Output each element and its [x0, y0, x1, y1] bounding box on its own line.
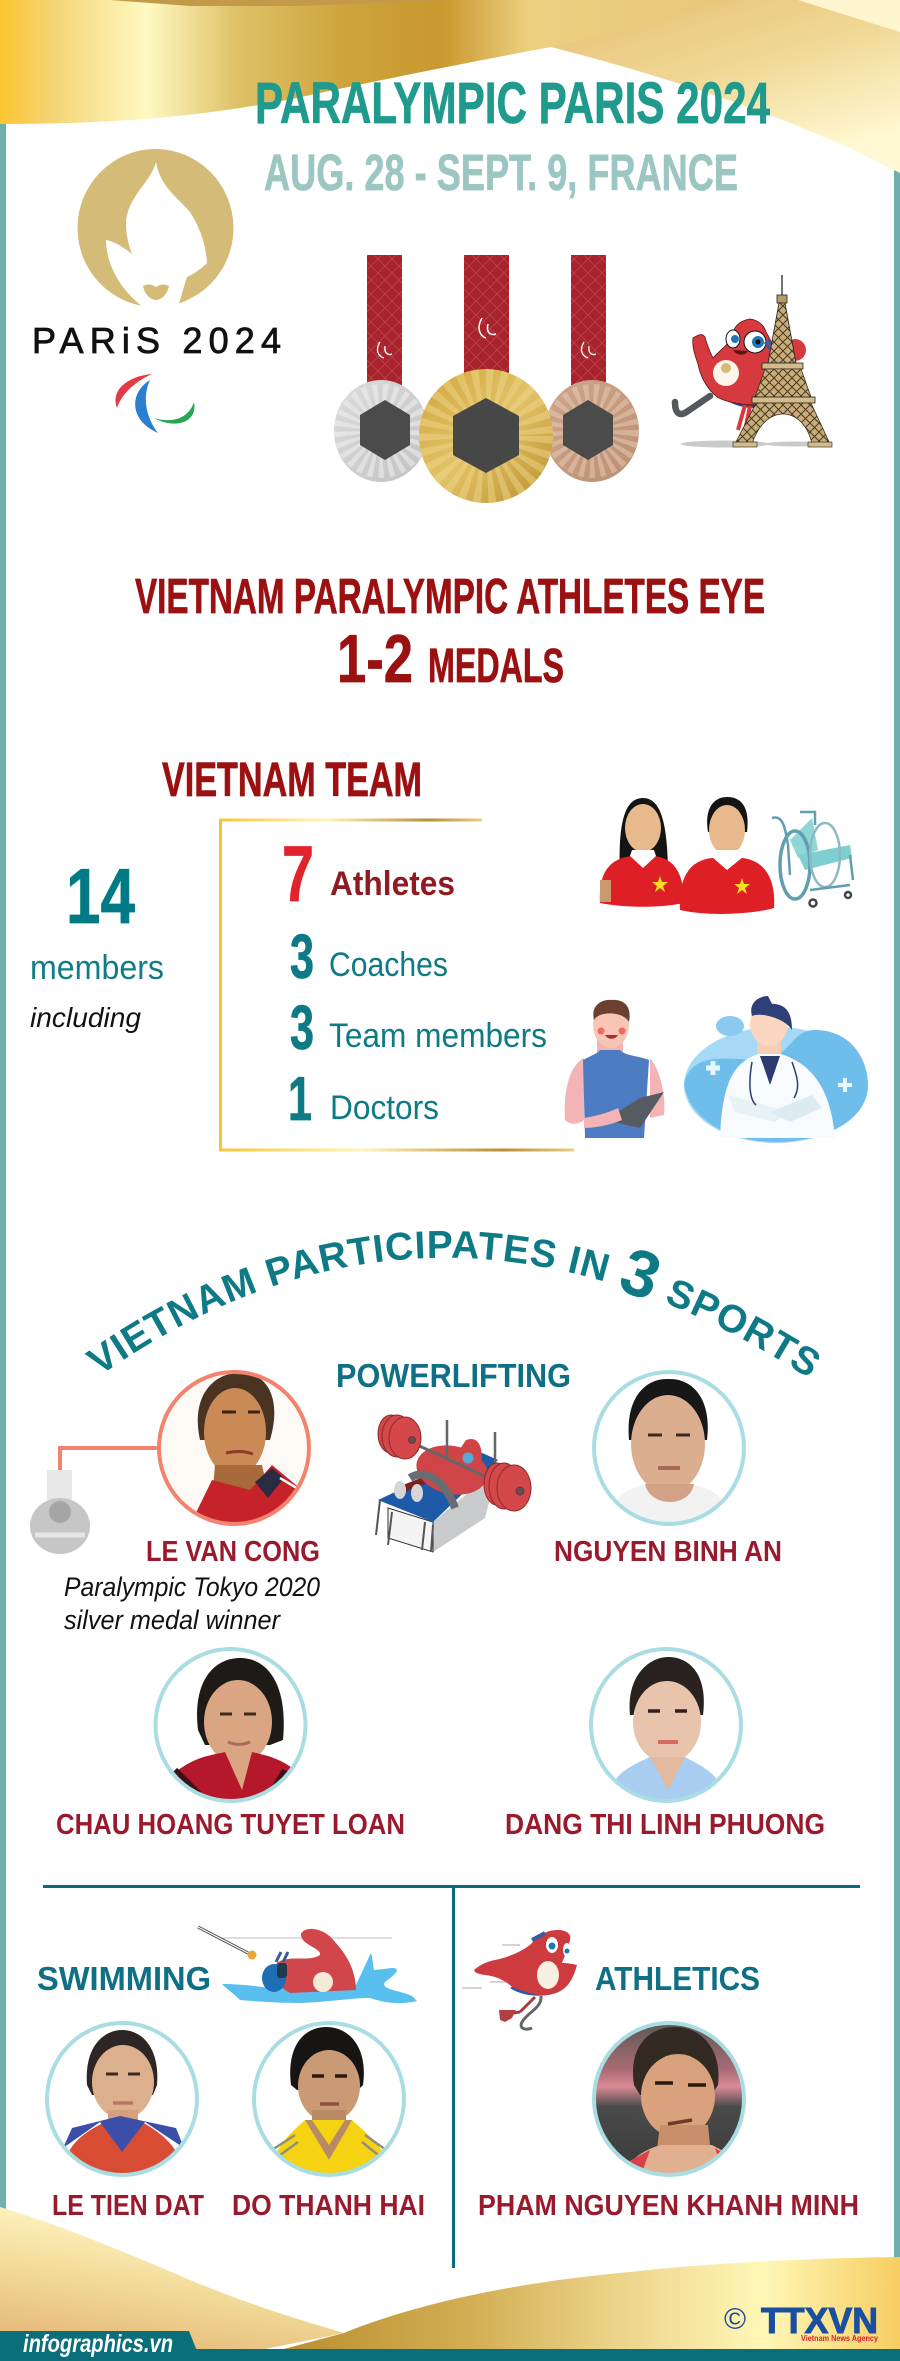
team members row: 3	[290, 994, 314, 1063]
divider lines	[43, 1885, 860, 2268]
athletes row	[282, 829, 455, 918]
doctors row: 1	[288, 1065, 312, 1134]
silver medal icon	[30, 1470, 90, 1554]
including label: including	[30, 1002, 141, 1033]
Paralympic agitos symbol	[115, 374, 194, 433]
infographics.vn label: infographics.vn	[23, 2330, 173, 2358]
portrait	[64, 2030, 182, 2173]
doctors row: Doctors	[330, 1089, 439, 1127]
portrait frame	[594, 2023, 744, 2175]
headline number 1-2: 1-2	[337, 621, 413, 697]
achievement note: silver medal winner	[64, 1605, 281, 1635]
portrait	[174, 1658, 291, 1799]
portrait	[274, 2027, 384, 2173]
Vietnam team heading: VIETNAM TEAM	[162, 754, 422, 807]
bronze ribbon	[571, 255, 606, 385]
copyright symbol: ©	[724, 2303, 746, 2336]
icon: coach with tablet	[565, 1000, 664, 1138]
silver ribbon	[367, 255, 402, 385]
agency letters: TTXVN	[761, 2300, 878, 2341]
icon: swimming mascot	[198, 1927, 417, 2003]
achievement note	[64, 1572, 320, 1635]
Phryge mascot with Eiffel tower	[675, 275, 832, 448]
TTXVN copyright logo	[724, 2300, 878, 2343]
top gold ribbon header	[0, 0, 900, 173]
curved sports heading: VIETNAM PARTICIPATES IN	[84, 1231, 610, 1370]
name: DO THANH HAI	[232, 2190, 425, 2222]
name: LE VAN CONG	[146, 1536, 320, 1568]
name: DANG THI LINH PHUONG	[505, 1809, 825, 1841]
athlete: Nguyen Binh An	[554, 1372, 782, 1568]
male athlete	[680, 797, 774, 914]
athlete: Le Tien Dat	[47, 2023, 204, 2222]
team breakdown bracket	[219, 818, 574, 1152]
doctors row	[288, 1065, 439, 1134]
portrait frame	[47, 2023, 197, 2175]
portrait	[616, 1657, 716, 1799]
icon: powerlifting mascot on bench	[376, 1415, 531, 1552]
athlete: Pham Nguyen Khanh Minh	[478, 2023, 859, 2222]
curved sports heading: SPORTS	[667, 1280, 820, 1375]
coaches row	[290, 923, 448, 992]
members label: members	[30, 949, 164, 987]
Eiffel tower	[733, 275, 832, 447]
connector line to silver medal	[60, 1448, 158, 1472]
athletes row: Athletes	[330, 865, 455, 903]
athletics heading: ATHLETICS	[595, 1960, 760, 1997]
swimming heading: SWIMMING	[37, 1960, 211, 1997]
icon: doctor on blue blob	[684, 996, 868, 1143]
medals with ribbons	[334, 255, 639, 503]
coaches row: Coaches	[329, 946, 448, 984]
number 14: 14	[66, 852, 135, 940]
athletes row: 7	[282, 829, 314, 918]
wheelchair	[772, 812, 853, 906]
athlete: Dang Thi Linh Phuong	[505, 1649, 825, 1841]
icon: running mascot	[462, 1930, 577, 2029]
portrait frame	[159, 1372, 309, 1524]
bottom gold ribbon footer	[0, 2207, 900, 2361]
curved sports heading: 3	[620, 1250, 660, 1298]
name: LE TIEN DAT	[52, 2190, 204, 2222]
name: CHAU HOANG TUYET LOAN	[56, 1809, 405, 1841]
right weight plates	[484, 1463, 531, 1511]
portrait	[159, 1372, 310, 1525]
name: NGUYEN BINH AN	[554, 1536, 782, 1568]
team total: 14 members	[30, 852, 164, 1033]
portrait frame	[594, 1372, 744, 1524]
team members row: Team members	[329, 1017, 547, 1055]
Paris 2024 logo emblem	[78, 149, 234, 307]
coaches row: 3	[290, 923, 314, 992]
achievement note: Paralympic Tokyo 2020	[64, 1572, 320, 1602]
team members row	[290, 994, 547, 1063]
headline word medals: MEDALS	[428, 640, 564, 693]
portrait frame	[591, 1649, 741, 1801]
gold medal	[419, 369, 553, 503]
powerlifting heading: POWERLIFTING	[336, 1357, 571, 1394]
portrait	[616, 1379, 722, 1522]
athlete: Le Van Cong	[30, 1372, 320, 1635]
Paris 2024 wordmark: PARiS 2024	[32, 320, 281, 361]
icon: athletes in red shirts	[600, 797, 853, 914]
name: PHAM NGUYEN KHANH MINH	[478, 2190, 859, 2222]
portrait frame	[254, 2023, 404, 2175]
athlete: Chau Hoang Tuyet Loan	[56, 1649, 405, 1841]
agency name: Vietnam News Agency	[801, 2333, 878, 2343]
gold ribbon	[464, 255, 509, 375]
headline	[135, 570, 765, 697]
portrait	[594, 2023, 744, 2180]
bronze medal	[545, 380, 639, 482]
silver medal	[334, 380, 428, 482]
female athlete	[600, 798, 684, 907]
athlete: Do Thanh Hai	[232, 2023, 425, 2222]
left weight plates	[378, 1415, 421, 1459]
portrait frame	[156, 1649, 306, 1801]
